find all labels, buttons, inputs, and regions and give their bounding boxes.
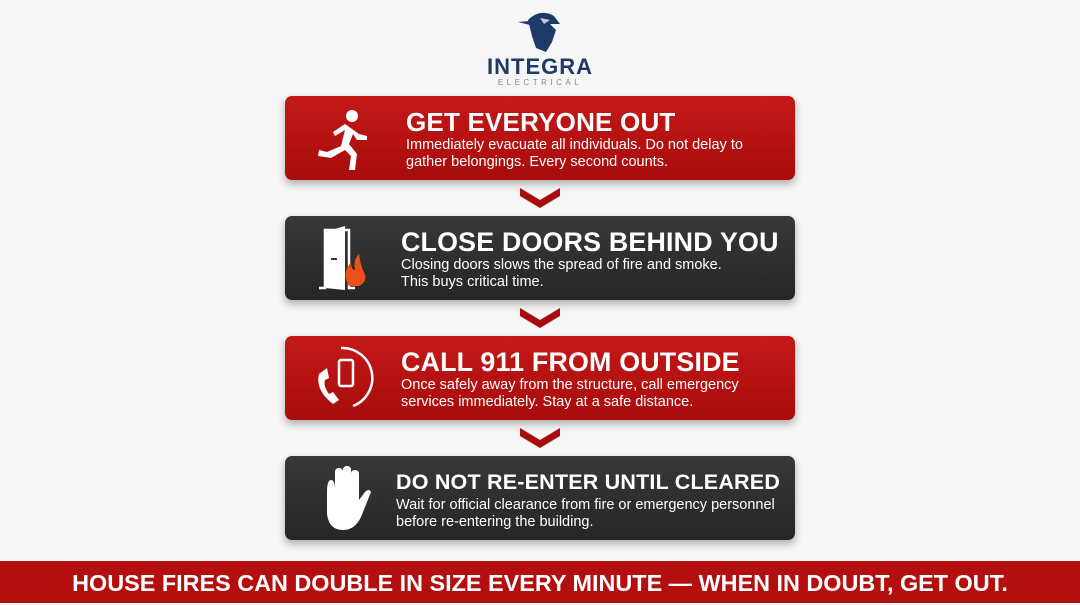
text [401,257,722,290]
card: close doors [285,216,795,300]
footer banner: HOUSE FIRES CAN DOUBLE IN SIZE EVERY MINUTE — WHEN IN DOUBT, GET OUT. [72,570,1008,596]
logo: ELECTRICAL [498,78,582,87]
text: Once safely away from the structure, call emergency [401,377,739,393]
card: call 911 [285,336,795,420]
icon: helmet head [518,12,560,52]
logo [487,12,593,87]
text: Immediately evacuate all individuals. Do not delay to [406,137,743,153]
text: Closing doors slows the spread of fire and smoke. [401,257,722,273]
arrow [520,308,560,328]
text [396,497,775,530]
title: DO NOT RE-ENTER UNTIL CLEARED [396,470,780,494]
card: get everyone out [285,96,795,180]
text [406,137,743,170]
title: CALL 911 FROM OUTSIDE [401,347,740,377]
card: do not re-enter [285,456,795,540]
icon: hand [327,466,371,530]
brand name: INTEGRA [487,54,593,79]
icon: running person [318,110,367,170]
text: Wait for official clearance from fire or emergency personnel [396,497,775,513]
text [401,377,739,410]
footer banner [0,561,1080,603]
title: CLOSE DOORS BEHIND YOU [401,227,779,257]
arrow [520,188,560,208]
text: This buys critical time. [401,274,544,290]
icon: phone [318,346,374,408]
text: gather belongings. Every second counts. [406,154,668,170]
icon: door with fire [319,226,366,290]
text: before re-entering the building. [396,514,594,530]
text: services immediately. Stay at a safe distance. [401,394,693,410]
title: GET EVERYONE OUT [406,107,676,137]
arrow [520,428,560,448]
